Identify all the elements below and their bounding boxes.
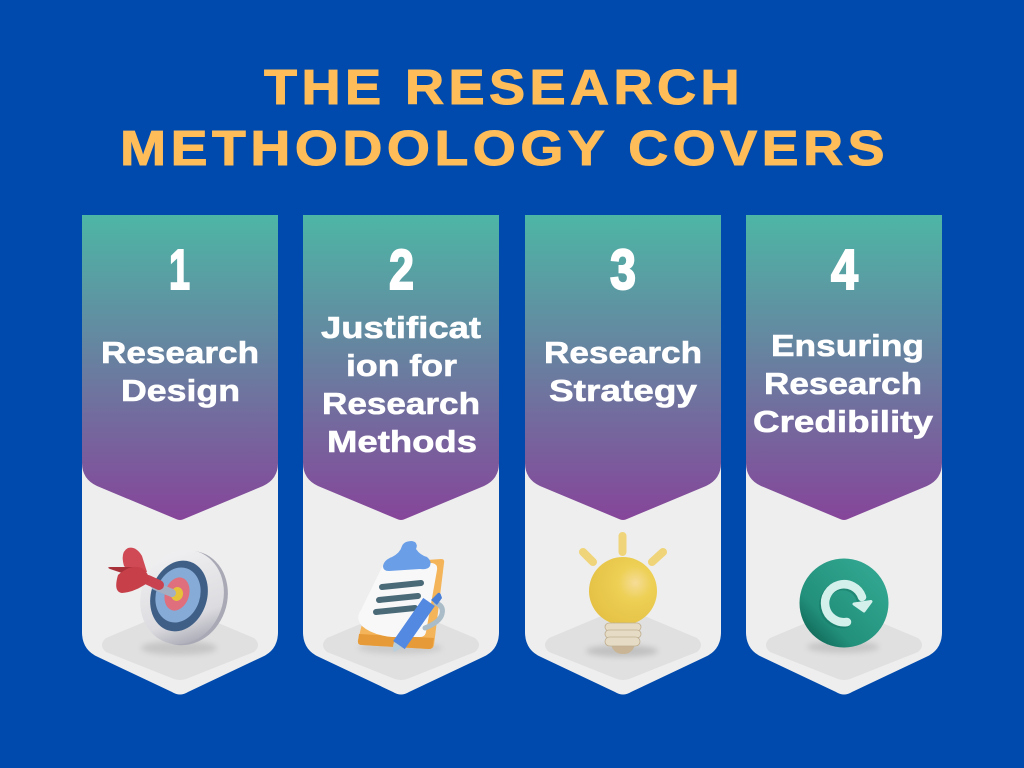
label: ensuring research credibility xyxy=(753,328,934,439)
label: justification for research methods: Methods xyxy=(327,424,477,459)
panel: research design xyxy=(82,215,278,694)
icon: light bulb xyxy=(583,536,663,657)
number 4: 4 xyxy=(831,238,858,302)
panel: research strategy xyxy=(525,215,721,694)
label: research strategy: Strategy xyxy=(549,373,698,408)
panel: ensuring research credibility xyxy=(746,215,942,694)
title: THE RESEARCH xyxy=(264,61,744,115)
label: justification for research methods: ion for xyxy=(346,348,457,383)
title xyxy=(120,61,889,176)
label: ensuring research credibility: Ensuring xyxy=(771,328,924,363)
label: justification for research methods xyxy=(321,310,481,459)
label: research design: Design xyxy=(121,373,240,408)
number 3: 3 xyxy=(610,238,636,302)
label: justification for research methods: Justificat xyxy=(321,310,481,345)
icon: target with dart xyxy=(108,538,241,657)
icon: green refresh button xyxy=(800,558,888,653)
panel: justification for research methods xyxy=(303,215,499,694)
label: research design xyxy=(101,335,259,408)
label: justification for research methods: Research xyxy=(322,386,480,421)
label: ensuring research credibility: Credibility xyxy=(753,404,934,439)
label: research design: Research xyxy=(101,335,259,370)
icon: clipboard and pen xyxy=(358,541,444,654)
number 1: 1 xyxy=(169,238,190,302)
label: ensuring research credibility: Research xyxy=(764,366,922,401)
label: research strategy: Research xyxy=(544,335,702,370)
title: METHODOLOGY COVERS xyxy=(120,122,889,176)
label: research strategy xyxy=(544,335,702,408)
number 2: 2 xyxy=(389,238,414,302)
